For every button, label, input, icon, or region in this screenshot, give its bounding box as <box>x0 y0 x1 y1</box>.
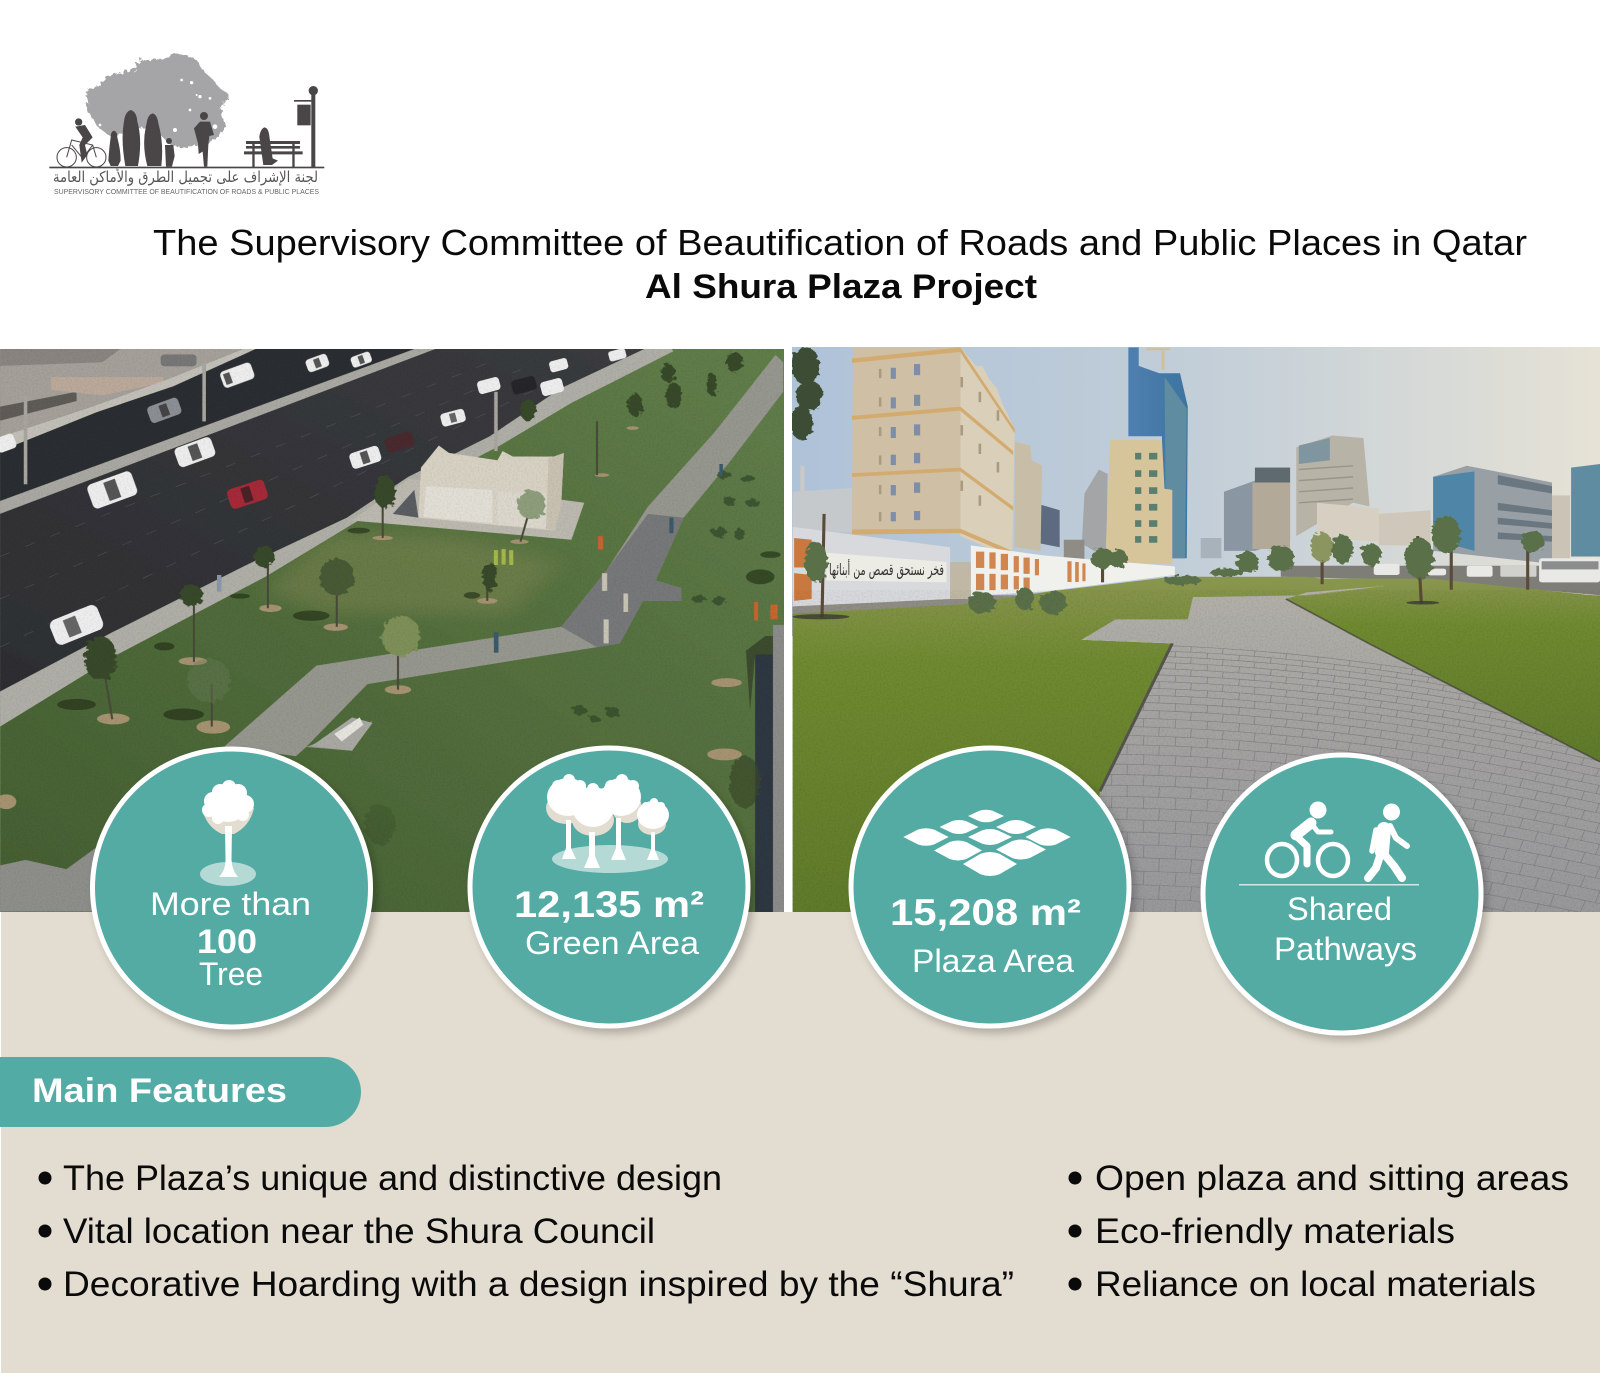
logo arabic name: لجنة الإشراف على تجميل الطرق والأماكن العامة <box>53 167 318 186</box>
text: plaza area: Plaza Area <box>912 943 1074 979</box>
hoarding right with faces <box>971 545 1175 596</box>
text: tree: Tree <box>199 956 263 992</box>
people <box>217 464 723 653</box>
text: pathways: Pathways <box>1274 931 1417 967</box>
left grass <box>793 577 1384 921</box>
text: 12,135 m2: 12,135 m² <box>514 884 704 925</box>
heading pill: main features: Main Features <box>32 1072 287 1110</box>
walkway <box>224 355 783 756</box>
feature list: right column: Eco-friendly materials <box>1095 1212 1455 1251</box>
right glass block <box>1433 466 1552 564</box>
panel: beige lower background <box>1 912 1600 1373</box>
icon: cyclist and pedestrian <box>1267 802 1407 878</box>
logo figures <box>75 86 318 167</box>
pavilion building <box>418 445 564 531</box>
hoarding left <box>793 527 950 606</box>
bench <box>311 717 372 751</box>
title: The Supervisory Committee of Beautification of Roads and Public Places in Qatar <box>153 222 1527 263</box>
logo bicycle <box>57 140 106 167</box>
heading pill: main features <box>0 1057 361 1127</box>
building forecourt <box>352 479 584 540</box>
ground band <box>793 595 1600 636</box>
text: green area: Green Area <box>525 925 699 961</box>
feature list: left column <box>38 1159 1014 1304</box>
feature list: left column: Decorative Hoarding with a design inspired by the “Shura” <box>63 1265 1014 1304</box>
near road <box>0 340 663 692</box>
feature list: left column: Vital location near the Shura Council <box>63 1212 655 1251</box>
icon: paving tiles <box>903 810 1071 876</box>
top-left pavement <box>0 349 243 437</box>
circle: green area <box>470 748 748 1026</box>
icon: single tree <box>200 780 256 886</box>
tree bases <box>0 426 742 809</box>
blue tower <box>1128 347 1188 558</box>
adjacent towers <box>1015 442 1042 551</box>
feature list: right column <box>1068 1159 1569 1304</box>
street and vehicles <box>1281 566 1600 595</box>
text: more than: More than <box>150 886 311 922</box>
tree trunks <box>102 421 597 727</box>
lamp posts <box>26 362 496 484</box>
circle: more than 100 trees <box>92 749 370 1027</box>
feature list: right column: Open plaza and sitting areas <box>1095 1159 1569 1198</box>
subtitle: Al Shura Plaza Project <box>645 268 1037 306</box>
trees and bushes <box>822 514 1528 618</box>
cars <box>0 348 627 647</box>
beige building <box>1105 440 1172 564</box>
right grass <box>1286 579 1600 764</box>
feature list: right column: Reliance on local materials <box>1095 1265 1536 1304</box>
paved pathway <box>1082 586 1600 921</box>
sidewalk <box>0 340 673 727</box>
icon: group of trees <box>546 774 669 873</box>
shrubs on lawn <box>573 471 760 722</box>
median <box>0 349 436 514</box>
text: 15,208 m2: 15,208 m² <box>890 892 1081 933</box>
logo: supervisory committee <box>49 53 324 196</box>
midtown towers <box>1224 468 1290 551</box>
path kerb <box>1100 643 1172 791</box>
circle: plaza area <box>851 748 1129 1026</box>
tree shadows <box>57 528 781 720</box>
feature list: left column: The Plaza’s unique and distinctive design <box>63 1159 722 1198</box>
main residential tower <box>852 347 960 531</box>
photo: aerial view of plaza and road <box>0 340 801 921</box>
hoarding calligraphy: فخر نستحق قصص من أبنائها <box>829 559 944 580</box>
far road <box>0 349 414 501</box>
circle: shared pathways <box>1203 755 1481 1033</box>
logo tree <box>86 53 229 147</box>
text: 100: 100 <box>197 923 257 961</box>
photo: ground-level view of paved pathway and skyline <box>790 340 1600 969</box>
gray buildings <box>1082 470 1108 558</box>
text: shared: Shared <box>1287 891 1392 927</box>
distant buildings left <box>793 488 852 532</box>
paving courses <box>1095 644 1600 961</box>
right wall <box>755 654 773 921</box>
tree crowns <box>84 352 760 845</box>
logo english name: SUPERVISORY COMMITTEE OF BEAUTIFICATION OF ROADS & PUBLIC PLACES <box>54 187 319 196</box>
